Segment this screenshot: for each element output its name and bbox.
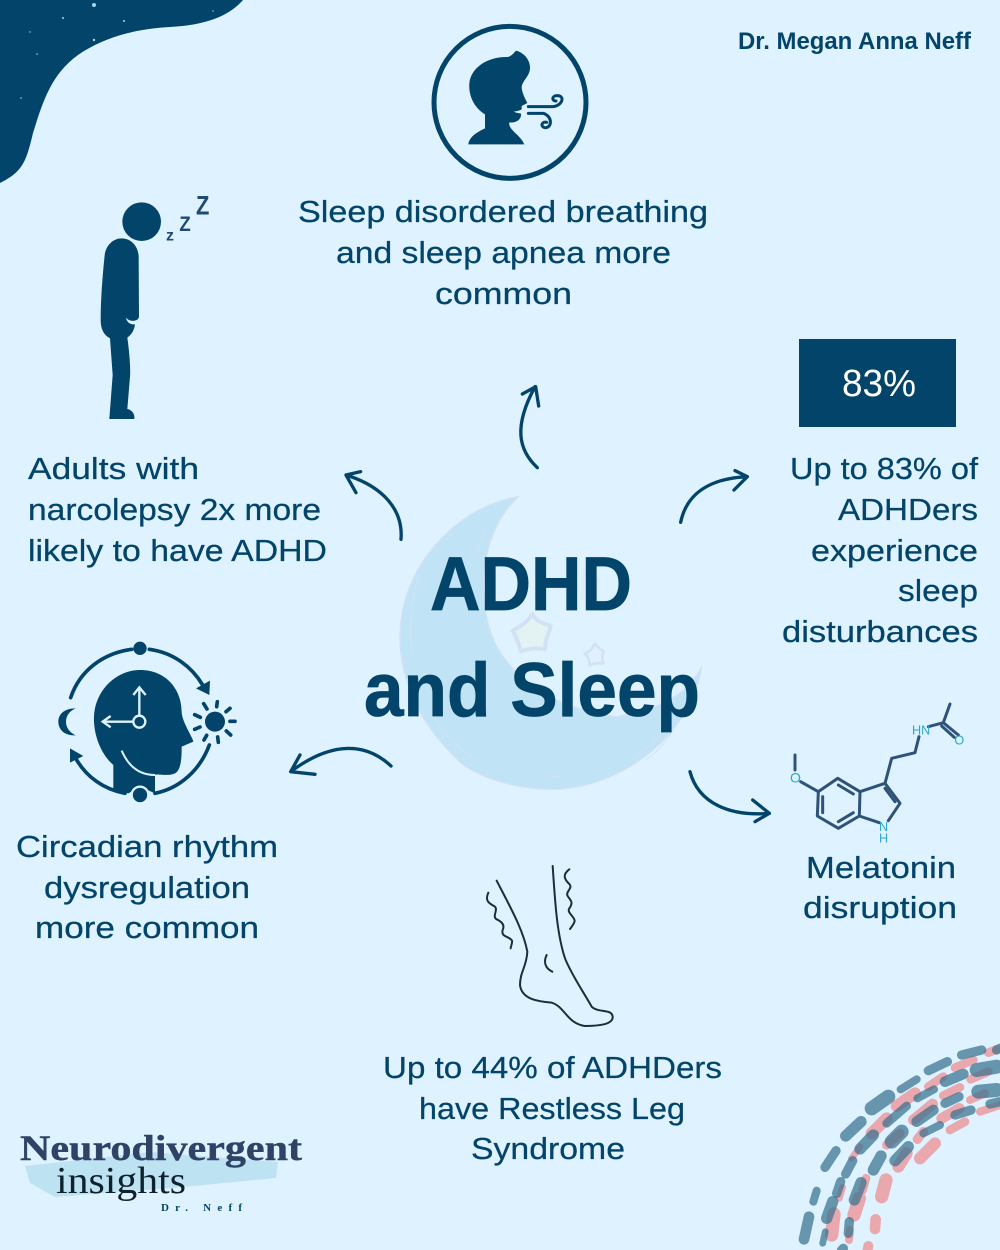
- text: narcolepsy: Adults with: [28, 451, 199, 486]
- title: ADHD: [430, 542, 632, 627]
- text: circadian rhythm: [16, 829, 278, 945]
- text: narcolepsy: [28, 451, 327, 568]
- text: sleep disturbances: [782, 451, 978, 649]
- crescent moon illustration: [400, 497, 702, 789]
- logo: Neurodivergent Insights: [20, 1128, 302, 1214]
- text: restless leg syndrome: [383, 1050, 722, 1166]
- title: and Sleep: [364, 648, 700, 733]
- text: restless leg syndrome: Up to 44% of ADHDers: [383, 1050, 722, 1085]
- stat box: 83%: 83%: [842, 363, 916, 405]
- icon: drowsy standing person: [101, 190, 209, 419]
- text: circadian rhythm: more common: [35, 910, 259, 945]
- decorative dashed arcs: [804, 1048, 1000, 1250]
- arrow: lower left: [291, 748, 391, 774]
- arrow: upper left: [346, 472, 401, 539]
- arrow: up: [521, 387, 539, 468]
- text: restless leg syndrome: have Restless Leg: [419, 1091, 685, 1126]
- night sky corner shape: [0, 0, 243, 183]
- text: sleep disturbances: sleep: [898, 573, 978, 608]
- icon: melatonin molecule: HN: [912, 723, 930, 737]
- logo: Neurodivergent Insights: Neurodivergent: [20, 1128, 302, 1168]
- arrows radiating from the title: [291, 387, 769, 822]
- text: sleep apnea: common: [435, 276, 572, 311]
- text: sleep disturbances: Up to 83% of: [790, 451, 978, 486]
- icon: melatonin molecule: H: [879, 832, 888, 846]
- text: circadian rhythm: dysregulation: [44, 870, 250, 905]
- text: sleep disturbances: disturbances: [782, 614, 978, 649]
- icon: head breathing out: [434, 26, 586, 178]
- text: circadian rhythm: Circadian rhythm: [16, 829, 278, 864]
- icon: melatonin molecule: N: [879, 820, 888, 834]
- icon: melatonin molecule: O: [954, 733, 964, 747]
- text: sleep disturbances: ADHDers: [838, 492, 978, 527]
- title: [364, 542, 700, 733]
- text: melatonin: Melatonin: [806, 850, 956, 885]
- text: sleep apnea: and sleep apnea more: [336, 235, 671, 270]
- icon: melatonin molecule: [790, 704, 964, 846]
- text: restless leg syndrome: Syndrome: [471, 1131, 625, 1166]
- arrow: upper right: [681, 471, 747, 522]
- icon: restless leg: [487, 866, 613, 1026]
- stat box: 83%: [799, 339, 956, 427]
- text: melatonin: disruption: [803, 890, 957, 925]
- text: sleep apnea: Sleep disordered breathing: [298, 194, 708, 229]
- icon: circadian head clock: [58, 642, 235, 803]
- text: narcolepsy: narcolepsy 2x more: [28, 492, 321, 527]
- icon: drowsy standing person: Z: [179, 212, 191, 236]
- icon: drowsy standing person: Z: [196, 190, 209, 220]
- logo: Neurodivergent Insights: Dr. Neff: [161, 1202, 242, 1214]
- text: melatonin: [803, 850, 957, 925]
- text: sleep apnea: [298, 194, 708, 311]
- text: narcolepsy: likely to have ADHD: [28, 533, 327, 568]
- icon: drowsy standing person: z: [166, 228, 174, 245]
- logo: Neurodivergent Insights: insights: [56, 1160, 186, 1202]
- author name: Dr. Megan Anna Neff: [738, 28, 972, 55]
- icon: melatonin molecule: O: [790, 769, 801, 785]
- text: sleep disturbances: experience: [811, 533, 978, 568]
- arrow: lower right: [690, 772, 769, 822]
